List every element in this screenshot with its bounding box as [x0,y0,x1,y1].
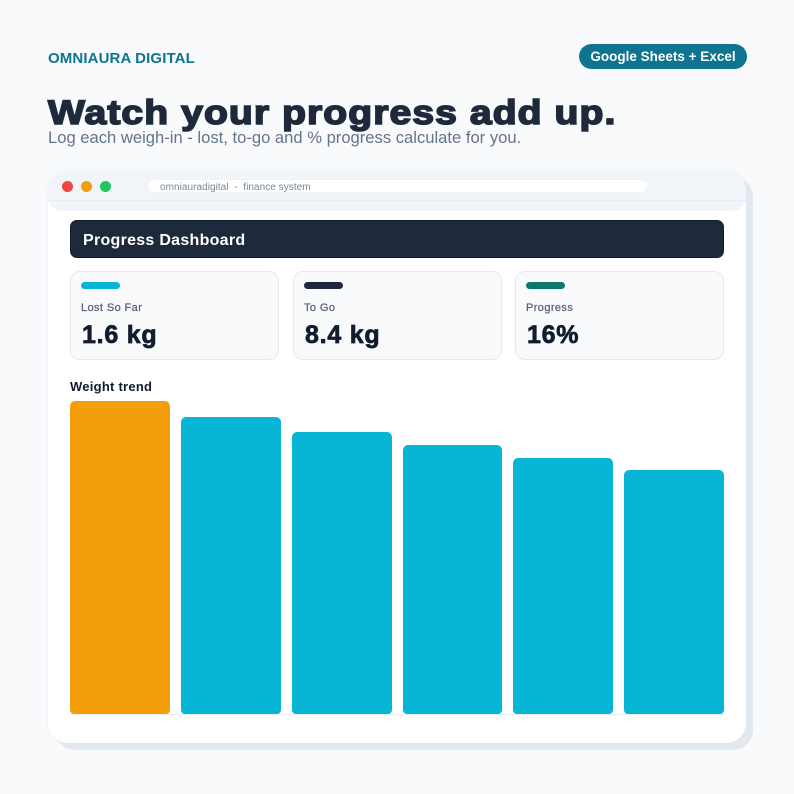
bar 6 [624,470,724,714]
accent pill [81,282,120,289]
accent pill [526,282,565,289]
dashboard header [70,220,724,258]
window shadow [55,177,753,750]
bar 3 [292,432,392,714]
browser title bar [48,170,746,211]
label: Progress [526,302,573,314]
stat card: to go [293,271,502,360]
window button: green [100,181,111,192]
title: Watch your progress add up. [48,94,616,132]
address bar: omniauradigital - finance system [160,182,311,193]
window button: red [62,181,73,192]
value: 8.4 kg [305,321,380,349]
label: To Go [304,302,335,314]
subtitle: Log each weigh-in - lost, to-go and % progress calculate for you. [48,128,521,147]
window button: amber [81,181,92,192]
stat card: progress [515,271,724,360]
badge: Google Sheets + Excel [579,44,747,69]
browser window [48,170,746,743]
stat card: lost so far [70,271,279,360]
value: 16% [527,321,579,349]
label: Lost So Far [81,302,142,314]
badge: Google Sheets + Excel: Google Sheets + Excel [590,49,736,64]
value: 1.6 kg [82,321,157,349]
bar chart: weight trend [70,401,724,715]
chart heading: Weight trend [70,378,152,394]
bar 2 [181,417,281,714]
address bar [147,179,648,193]
bar 1 [70,401,170,714]
accent pill [304,282,343,289]
bar 4 [402,445,502,714]
title bar divider [48,200,746,201]
brand name: OMNIAURA DIGITAL [48,50,195,67]
bar 5 [513,458,613,714]
dashboard header: Progress Dashboard [83,232,245,249]
